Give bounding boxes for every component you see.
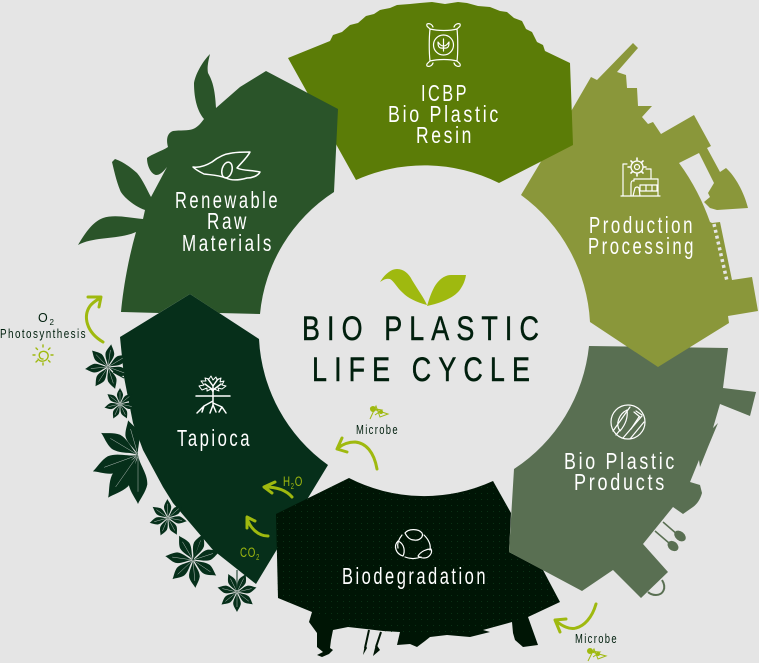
tapioca leaves [79, 337, 265, 620]
icon: sun [33, 345, 53, 365]
panel: biodegradation [276, 478, 560, 657]
icon: green sprout logo [380, 269, 466, 306]
label: Production Processing [588, 212, 696, 259]
label: Production Processing: Production [589, 212, 695, 238]
arrow: microbe center [337, 438, 377, 469]
fork [655, 531, 680, 553]
label: Renewable Raw Materials: Materials [182, 230, 274, 256]
label: ICBP Bio Plastic Resin: Resin [416, 122, 474, 148]
label: photosynthesis: Photosynthesis [0, 327, 87, 341]
icon: microbe center [370, 406, 388, 419]
icon: tree with roots [196, 376, 230, 413]
buried utensils [365, 630, 381, 648]
icon: factory with gear [621, 158, 660, 196]
label: Renewable Raw Materials [175, 187, 280, 256]
title: LIFE CYCLE [312, 351, 537, 389]
pot handle [648, 580, 664, 595]
title [302, 310, 546, 389]
panel: bio plastic products [509, 346, 756, 598]
label: H2O: O [295, 474, 303, 489]
panel: production processing [521, 43, 758, 367]
title: BIO PLASTIC [302, 310, 546, 348]
label: ICBP Bio Plastic Resin [388, 80, 501, 148]
arrow: water [264, 482, 292, 497]
label: Production Processing: Processing [588, 233, 696, 259]
label: Renewable Raw Materials: Renewable [175, 187, 280, 213]
label: ICBP Bio Plastic Resin: Bio Plastic [388, 101, 501, 127]
icon: microbe bottom [588, 648, 606, 661]
label: Renewable Raw Materials: Raw [207, 208, 249, 234]
arrow: photosynthesis [86, 297, 103, 342]
label: Bio Plastic Products: Products [574, 469, 667, 495]
label: oxygen: O [38, 311, 50, 325]
label: microbe center: Microbe [356, 423, 399, 437]
label: Tapioca: Tapioca [177, 425, 252, 451]
icon: plate with cutlery [611, 405, 645, 439]
label: CO2: 2 [256, 553, 260, 562]
panel: ICBP bio plastic resin [288, 2, 573, 183]
panel: tapioca [79, 294, 328, 620]
spoon [663, 522, 688, 544]
label: Bio Plastic Products: Bio Plastic [564, 448, 677, 474]
icon: resin bag [427, 24, 460, 66]
arrow: carbon dioxide [247, 517, 268, 536]
icon: cassava root [193, 152, 260, 180]
label: H2O: 2 [291, 482, 295, 491]
label: oxygen: 2 [50, 318, 56, 327]
label: microbe bottom: Microbe [575, 632, 618, 646]
label: CO2: CO [240, 545, 262, 560]
label: Bio Plastic Products [564, 448, 677, 495]
label: ICBP Bio Plastic Resin: ICBP [421, 80, 469, 106]
spoon and fork tips [363, 644, 380, 656]
conveyor belt [714, 224, 727, 281]
label: H2O: H [283, 474, 294, 489]
arrow: microbe bottom [555, 604, 596, 632]
panel: renewable raw materials [78, 54, 338, 314]
label: Biodegradation: Biodegradation [342, 563, 488, 589]
icon: recycle leaves [396, 530, 432, 558]
